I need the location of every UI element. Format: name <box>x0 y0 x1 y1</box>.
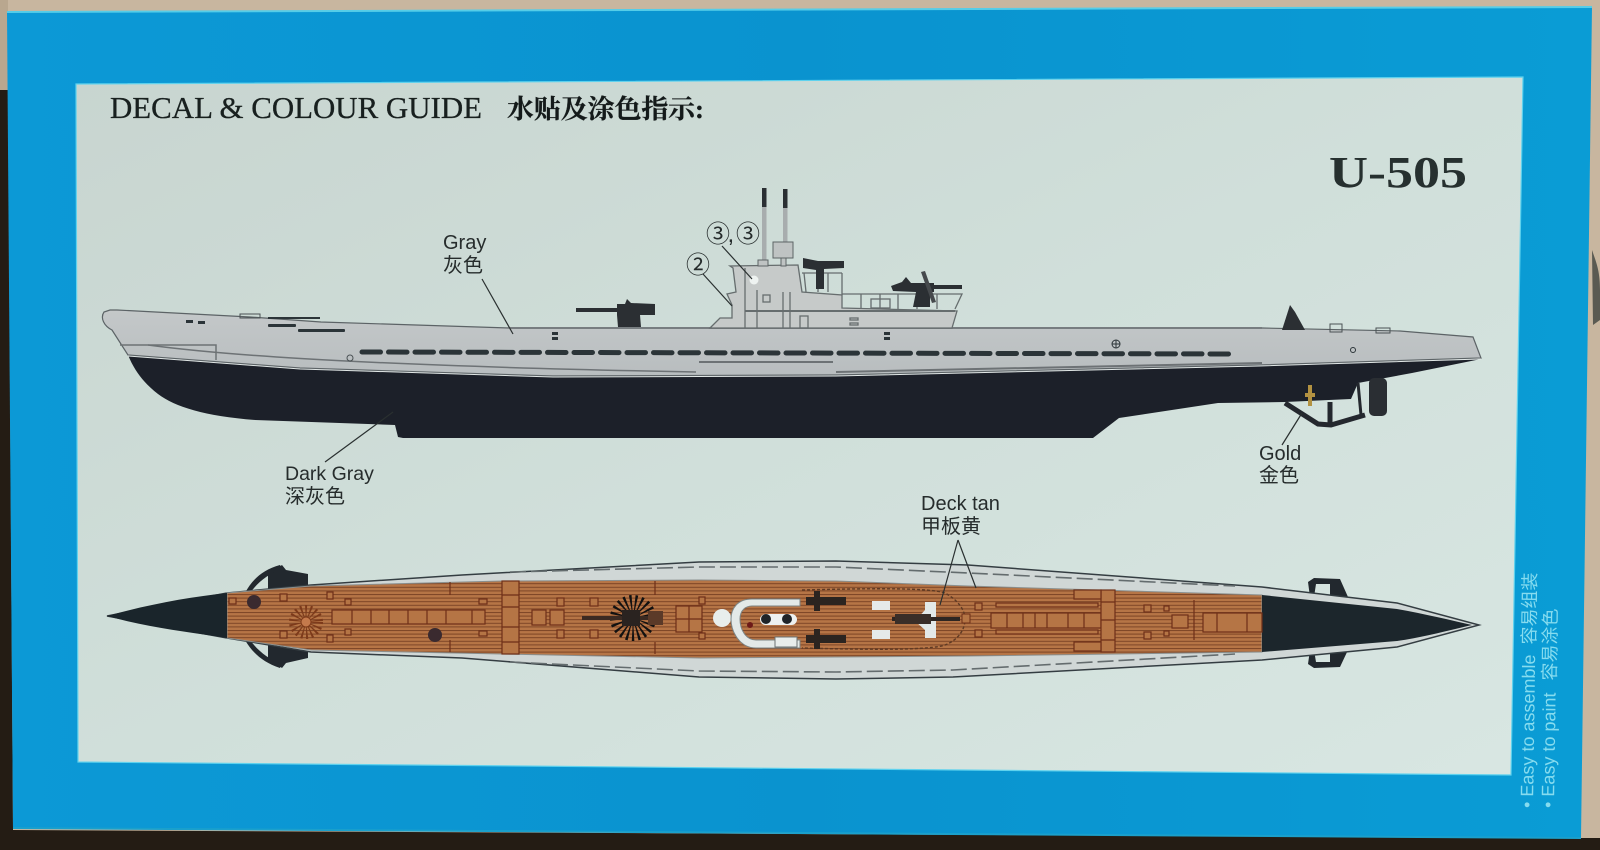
top view: fore radial mark <box>297 613 315 631</box>
label: dark gray: Dark Gray <box>285 463 374 485</box>
top view: twin bridge guns <box>806 591 846 649</box>
top view: deck panels aft <box>975 590 1262 652</box>
callout: decal number 2: ② <box>686 252 710 279</box>
heading: Chinese title: 水贴及涂色指示: <box>507 95 704 124</box>
top view: bow black cone <box>107 593 227 638</box>
top view: outer grey hull <box>107 561 1479 679</box>
leader lines <box>325 246 1302 605</box>
top view: wooden deck <box>227 580 1262 658</box>
top view: aft panel dividers <box>1007 600 1247 640</box>
side view: hull waterline stripes <box>120 328 1481 377</box>
label: dark gray: 深灰色 <box>285 485 345 508</box>
top view: deck panel dividers <box>352 581 702 654</box>
side view: stern jumping wire mount <box>1282 305 1305 330</box>
side view: fore deck gun <box>576 299 655 327</box>
heading: decal and colour guide: DECAL & COLOUR GUIDE <box>110 90 482 125</box>
chart: top view of submarine <box>107 561 1479 679</box>
side view: periscopes and antenna <box>758 188 793 266</box>
top view: fore hatch circles <box>247 595 442 642</box>
side view: grey upper hull <box>102 310 1481 376</box>
side view: propeller guard strut <box>1285 383 1365 425</box>
top view: deck gun with radial mark <box>582 606 663 630</box>
panel: light guide card <box>76 77 1523 775</box>
side view: small deck details <box>186 314 1390 361</box>
top view: conning tower <box>713 589 965 649</box>
side view: dark lower hull <box>128 355 1481 438</box>
label: gray: 灰色 <box>443 254 483 277</box>
side view: gold propeller <box>1305 385 1315 406</box>
top view: stern black cone <box>1262 595 1472 652</box>
label: gold: Gold <box>1259 443 1301 465</box>
label: deck tan: Deck tan <box>921 493 1000 515</box>
label: gray: Gray <box>443 232 486 254</box>
heading: model name U-505: U-505 <box>1329 148 1467 197</box>
top view: rear gun platform <box>872 601 970 639</box>
top view: deck panels fore <box>229 581 705 654</box>
side view: rudder <box>1369 378 1387 416</box>
side slogan: easy to assemble: • Easy to assemble容易组装 <box>1517 572 1540 808</box>
callout: decal number 3: ③, ③ <box>706 221 760 248</box>
chart: side profile of submarine <box>102 188 1481 438</box>
top view: hydroplanes <box>245 565 1348 668</box>
top view: hull edge dashes <box>510 567 1235 672</box>
label: deck tan: 甲板黄 <box>921 515 981 538</box>
decal mark on conning tower <box>750 276 758 284</box>
side view: bridge anti-aircraft gun <box>803 258 844 289</box>
side slogan: easy to paint: • Easy to paint容易涂色 <box>1538 608 1561 808</box>
side view: rear anti-aircraft gun <box>891 271 962 307</box>
side view: row of limber holes <box>362 352 1234 354</box>
label: gold: 金色 <box>1259 464 1299 487</box>
side view: conning tower <box>710 265 962 328</box>
